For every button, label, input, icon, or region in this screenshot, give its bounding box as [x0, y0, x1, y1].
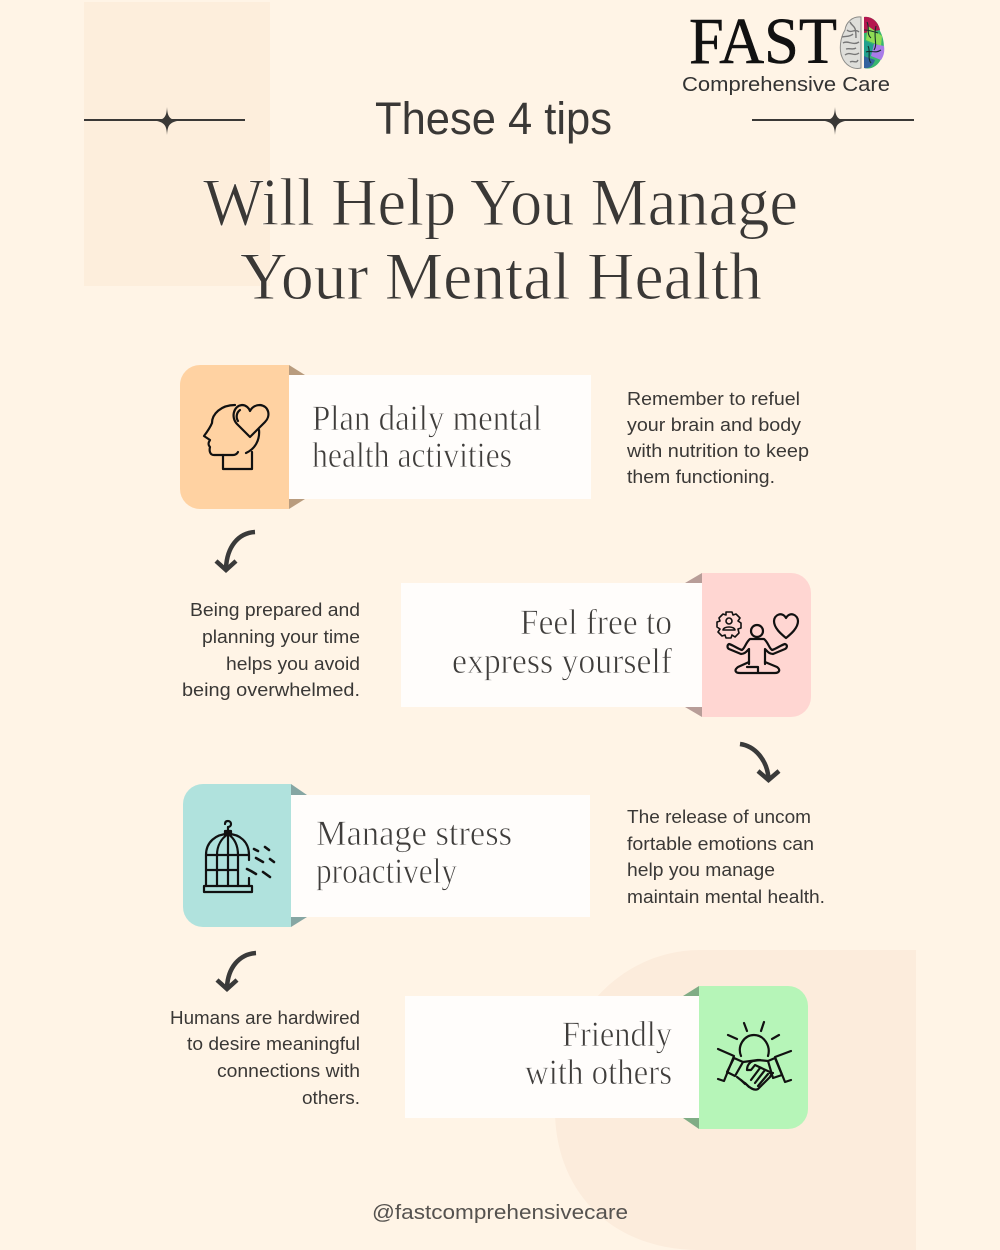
tip 2 description: planning your time	[202, 627, 360, 647]
tip 2 heading: express yourself	[452, 641, 672, 681]
tip 4 heading: with others	[525, 1052, 672, 1092]
tip 3 heading: proactively	[316, 851, 457, 891]
subtitle: These 4 tips	[375, 93, 612, 144]
arrow: tip 3 to tip 4	[217, 953, 256, 989]
tip 1 description: Remember to refuel	[627, 389, 800, 409]
logo: FAST	[689, 5, 837, 78]
title	[203, 164, 798, 314]
title: Will Help You Manage	[203, 164, 798, 240]
tip 2 description: helps you avoid	[226, 654, 360, 674]
tip 3 heading	[316, 813, 512, 891]
divider with sparkle left	[84, 107, 245, 135]
tip 4 description: connections with	[217, 1061, 360, 1081]
tip 1 description: with nutrition to keep	[626, 441, 809, 461]
logo: Comprehensive Care	[682, 74, 890, 96]
tip 4 description	[170, 1008, 360, 1108]
arrow: tip 1 to tip 2	[216, 532, 255, 570]
tip 3 description: The release of uncom	[627, 807, 811, 827]
tip 3 description: fortable emotions can	[627, 834, 814, 854]
tip 4 description: others.	[302, 1088, 360, 1108]
tip 1 description: your brain and body	[627, 415, 801, 435]
tip 3 description: help you manage	[627, 860, 775, 880]
tip 4 description: Humans are hardwired	[170, 1008, 360, 1028]
tip 2 description: being overwhelmed.	[182, 680, 360, 700]
tip 1 description	[626, 389, 809, 487]
divider with sparkle right	[752, 107, 914, 135]
tip 1 description: them functioning.	[627, 467, 775, 487]
icon: head with heart	[204, 405, 268, 469]
tip 3 description	[627, 807, 825, 907]
panel: tip 1	[180, 365, 591, 509]
title: Your Mental Health	[240, 238, 762, 314]
decorative rounded shape bottom right	[555, 950, 916, 1250]
arrow: tip 2 to tip 3	[740, 744, 779, 780]
tip 2 description	[182, 600, 360, 700]
tip 4 heading	[525, 1014, 672, 1092]
tip 1 heading: health activities	[312, 435, 512, 475]
tip 4 description: to desire meaningful	[187, 1034, 360, 1054]
tip 2 description: Being prepared and	[190, 600, 360, 620]
icon: birdcage with birds	[204, 821, 274, 892]
tip 1 heading	[312, 398, 542, 475]
panel: tip 4	[405, 986, 808, 1129]
logo	[682, 5, 890, 96]
tip 3 heading: Manage stress	[316, 813, 512, 853]
decorative rectangle top left	[84, 2, 270, 286]
icon: meditating person with gear and heart	[717, 612, 798, 673]
icon: brain	[840, 17, 884, 69]
tip 1 heading: Plan daily mental	[312, 398, 542, 438]
tip 4 heading: Friendly	[562, 1014, 672, 1054]
panel: tip 3	[183, 784, 590, 927]
icon: handshake with sun	[718, 1022, 791, 1090]
tip 2 heading: Feel free to	[520, 602, 672, 642]
panel: tip 2	[401, 573, 811, 717]
tip 2 heading	[452, 602, 672, 681]
tip 3 description: maintain mental health.	[627, 887, 825, 907]
footer handle: @fastcomprehensivecare	[372, 1202, 628, 1224]
